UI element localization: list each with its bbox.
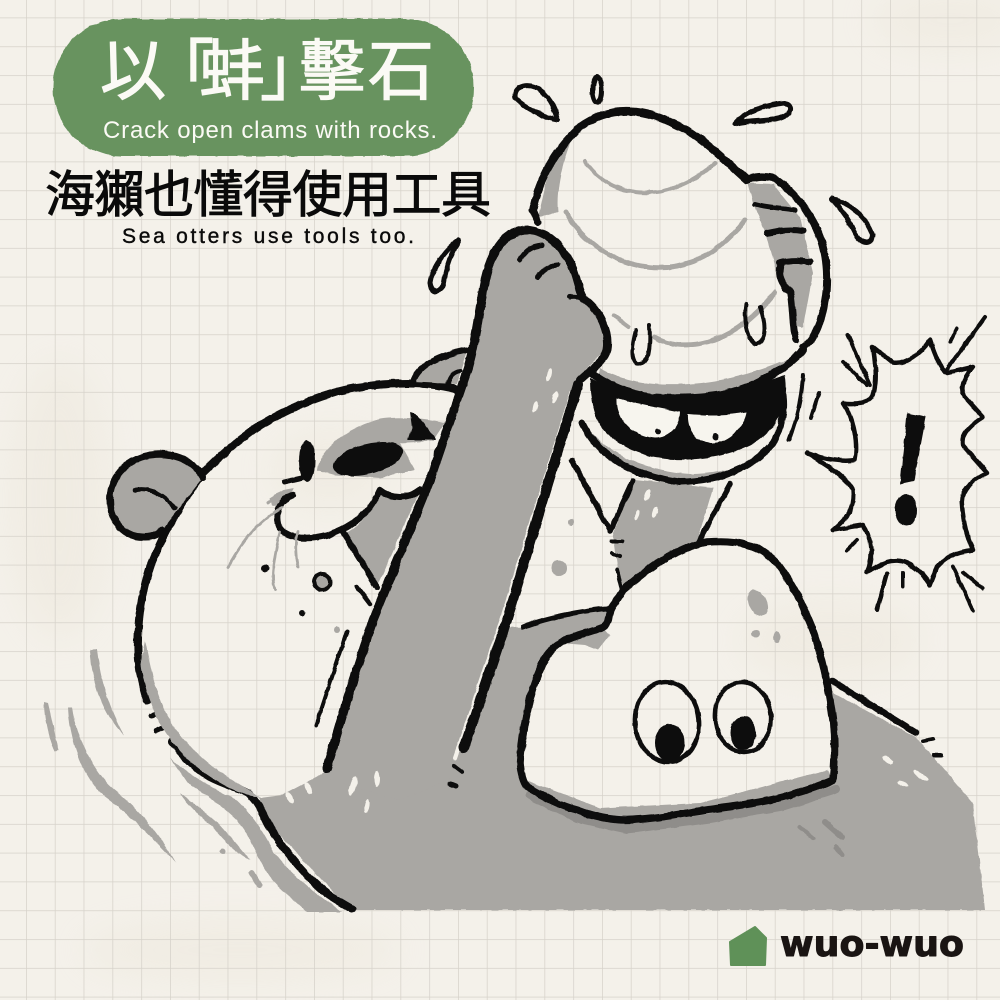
- hinge outline: [747, 177, 827, 347]
- lower shell: [582, 420, 740, 482]
- upper shell outline: [533, 111, 747, 210]
- english caption: Sea otters use tools too.: [122, 225, 414, 248]
- banner background: [53, 19, 474, 156]
- rock cast shadow: [530, 789, 836, 829]
- rock right eye: [711, 679, 775, 755]
- shell growth arcs: [566, 161, 775, 345]
- chinese subtitle: 海獺也懂得使用工具: [45, 155, 491, 227]
- nose shade: [270, 488, 294, 507]
- head outline: [138, 384, 457, 909]
- title banner: [53, 18, 474, 156]
- shell shading: [538, 132, 575, 218]
- second arm behind clam: [523, 460, 730, 627]
- brand wordmark: wuo-wuo: [780, 924, 964, 965]
- arm highlights: [284, 368, 559, 813]
- motion lines: [789, 375, 819, 440]
- muzzle outline: [277, 490, 420, 538]
- rock left eye: [631, 679, 703, 765]
- exclamation burst: [807, 317, 987, 610]
- rock speckles: [744, 587, 772, 619]
- nose: [299, 440, 315, 482]
- exclamation mark: [900, 413, 926, 484]
- thin line by arm: [316, 631, 347, 726]
- right ear: [413, 350, 467, 384]
- water ripples: [44, 648, 342, 912]
- chinese title: 以「蚌」擊石: [100, 18, 434, 114]
- chin shade: [344, 488, 421, 585]
- far eye: [408, 412, 436, 440]
- teeth: [617, 398, 680, 438]
- english subtitle: Crack open clams with rocks.: [103, 117, 437, 144]
- raised arm and fist: [325, 230, 608, 800]
- whisker spots: [262, 564, 268, 572]
- mouth interior: [590, 375, 786, 460]
- subtitle block: [45, 155, 491, 248]
- rock shading: [527, 770, 833, 820]
- clam: [533, 111, 827, 482]
- burst accent lines: [843, 317, 985, 610]
- brand logo: [730, 924, 964, 965]
- face: [228, 412, 445, 633]
- sweat drops: [430, 77, 873, 292]
- head inner shade: [141, 640, 262, 798]
- main eye: [329, 436, 407, 482]
- left ear: [110, 454, 203, 537]
- otter belly and water body: [260, 608, 985, 910]
- arm halo along right edge: [455, 392, 572, 758]
- back outline and body marks: [800, 681, 941, 855]
- illustration: sea otter with clam and rock: [44, 77, 987, 912]
- shell drips: [632, 325, 649, 363]
- eye mask: [317, 418, 445, 478]
- hinge band: [748, 183, 813, 327]
- rock: [520, 541, 836, 829]
- arm outline: [327, 230, 608, 786]
- icon: green house: [730, 927, 766, 965]
- rock outline: [520, 541, 834, 820]
- burst outline: [807, 340, 987, 585]
- whiskers: [228, 496, 298, 590]
